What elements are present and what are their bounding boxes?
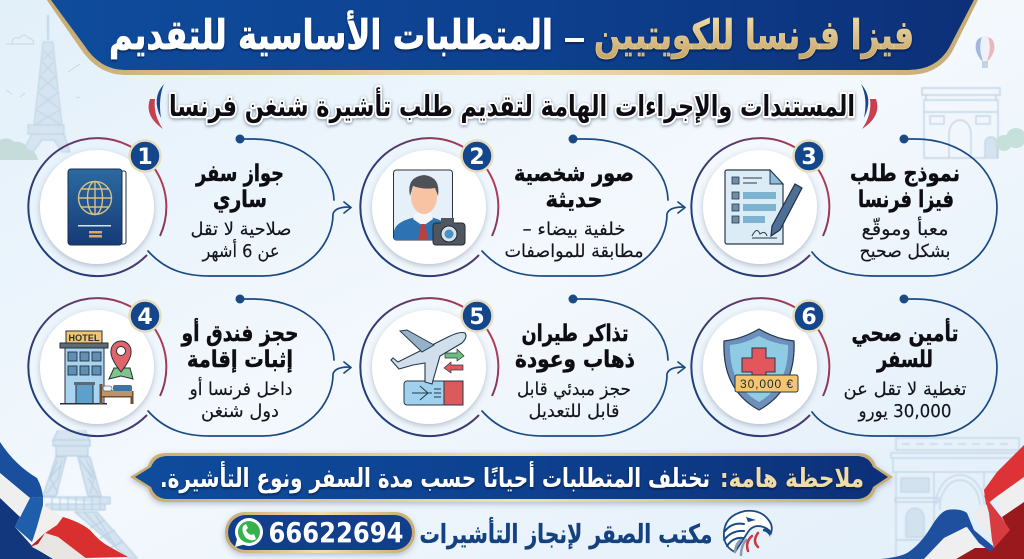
text: دول شنغن bbox=[201, 401, 279, 422]
number badge bbox=[462, 300, 492, 332]
text bbox=[515, 321, 635, 422]
text: داخل فرنسا أو bbox=[189, 377, 292, 400]
text: للسفر bbox=[876, 347, 933, 373]
text: نموذج طلب bbox=[850, 161, 960, 187]
text: حجز فندق أو bbox=[181, 317, 298, 347]
text: قابل للتعديل bbox=[528, 401, 620, 422]
background illustration: cloud outline and birds bbox=[6, 35, 80, 98]
title bbox=[109, 9, 914, 59]
connector bbox=[148, 139, 351, 276]
title: المتطلبات الأساسية للتقديم bbox=[109, 9, 553, 59]
background illustration: small triumphal arch bbox=[922, 88, 1000, 158]
note text: تختلف المتطلبات أحيانًا حسب مدة السفر ونوع التأشيرة. bbox=[160, 461, 710, 494]
number badge: 3 bbox=[801, 145, 817, 170]
text: فيزا فرنسا bbox=[858, 187, 954, 213]
icon: portrait and camera bbox=[394, 170, 465, 245]
text bbox=[190, 161, 292, 262]
card 4: hotel bbox=[28, 294, 351, 436]
connector bbox=[482, 139, 685, 276]
number badge: 1 bbox=[137, 145, 153, 170]
number badge bbox=[794, 140, 824, 172]
decoration: French flag ribbon right bbox=[881, 445, 1024, 559]
number badge bbox=[462, 140, 492, 172]
note text: ملاحظة هامة: bbox=[720, 464, 864, 494]
icon: plane and ticket bbox=[391, 330, 466, 405]
background illustration: hot air balloon bbox=[975, 36, 995, 68]
icon: shield with amount bbox=[724, 329, 798, 410]
icon: hotel with location pin bbox=[60, 331, 133, 404]
text: عن 6 أشهر bbox=[202, 239, 280, 262]
text: إثبات إقامة bbox=[187, 347, 293, 373]
card 5: flights bbox=[360, 294, 685, 436]
text: مطابقة للمواصفات bbox=[504, 241, 644, 262]
connector bbox=[482, 299, 685, 436]
text: صلاحية لا تقل bbox=[190, 219, 292, 240]
footer phone pill: 66622694 bbox=[268, 516, 404, 549]
text: تذاكر طيران bbox=[522, 321, 628, 347]
note banner bbox=[130, 453, 893, 502]
text bbox=[181, 317, 298, 422]
text: ذهاب وعودة bbox=[515, 347, 635, 373]
background illustration: small Eiffel tower bbox=[22, 15, 70, 152]
text bbox=[504, 161, 644, 262]
header banner bbox=[44, 0, 980, 75]
card 3: form bbox=[691, 134, 997, 276]
text: 30,000 يورو bbox=[858, 401, 952, 422]
subtitle with French-colour brackets bbox=[149, 84, 877, 129]
text bbox=[850, 161, 960, 262]
text: تأمين صحي bbox=[852, 317, 958, 347]
icon: shield with amount: 30,000 € bbox=[740, 377, 793, 391]
text: بشكل صحيح bbox=[860, 241, 950, 262]
number badge: 2 bbox=[469, 145, 485, 170]
card 6: insurance bbox=[691, 294, 997, 436]
text: معبأ وموقّع bbox=[862, 216, 948, 240]
text: صور شخصية bbox=[514, 161, 634, 187]
text bbox=[844, 317, 966, 422]
icon: hotel with location pin: HOTEL bbox=[68, 333, 100, 343]
background illustration: large Eiffel tower bbox=[43, 430, 137, 558]
title: فيزا فرنسا للكويتيين bbox=[594, 11, 914, 59]
number badge bbox=[130, 140, 160, 172]
number badge bbox=[794, 300, 824, 332]
background illustration: trees bbox=[996, 128, 1024, 151]
background illustration: large triumphal arch bbox=[891, 438, 1021, 559]
icon: eagle logo bbox=[724, 511, 772, 555]
icon: document and pen bbox=[725, 170, 802, 244]
card 1: passport bbox=[28, 134, 351, 276]
decoration: French flag ribbon left bbox=[0, 442, 128, 559]
text: تغطية لا تقل عن bbox=[844, 379, 966, 400]
background illustration: green bushes bbox=[0, 138, 38, 160]
number badge: 6 bbox=[801, 305, 817, 330]
number badge bbox=[130, 300, 160, 332]
text: جواز سفر bbox=[195, 161, 284, 187]
number badge: 5 bbox=[469, 305, 485, 330]
text: حجز مبدئي قابل bbox=[517, 379, 631, 400]
icon: passport bbox=[68, 169, 126, 245]
card 2: photos bbox=[360, 134, 685, 276]
connector bbox=[148, 299, 351, 436]
footer office name: مكتب الصقر لإنجاز التأشيرات bbox=[420, 517, 712, 550]
text: خلفية بيضاء – bbox=[522, 219, 626, 240]
connector bbox=[812, 139, 997, 276]
connector bbox=[812, 299, 997, 436]
number badge: 4 bbox=[137, 305, 153, 330]
text: ساري bbox=[213, 187, 267, 213]
text: حديثة bbox=[546, 187, 602, 213]
icon: WhatsApp bbox=[235, 518, 263, 547]
footer phone pill bbox=[225, 512, 415, 553]
